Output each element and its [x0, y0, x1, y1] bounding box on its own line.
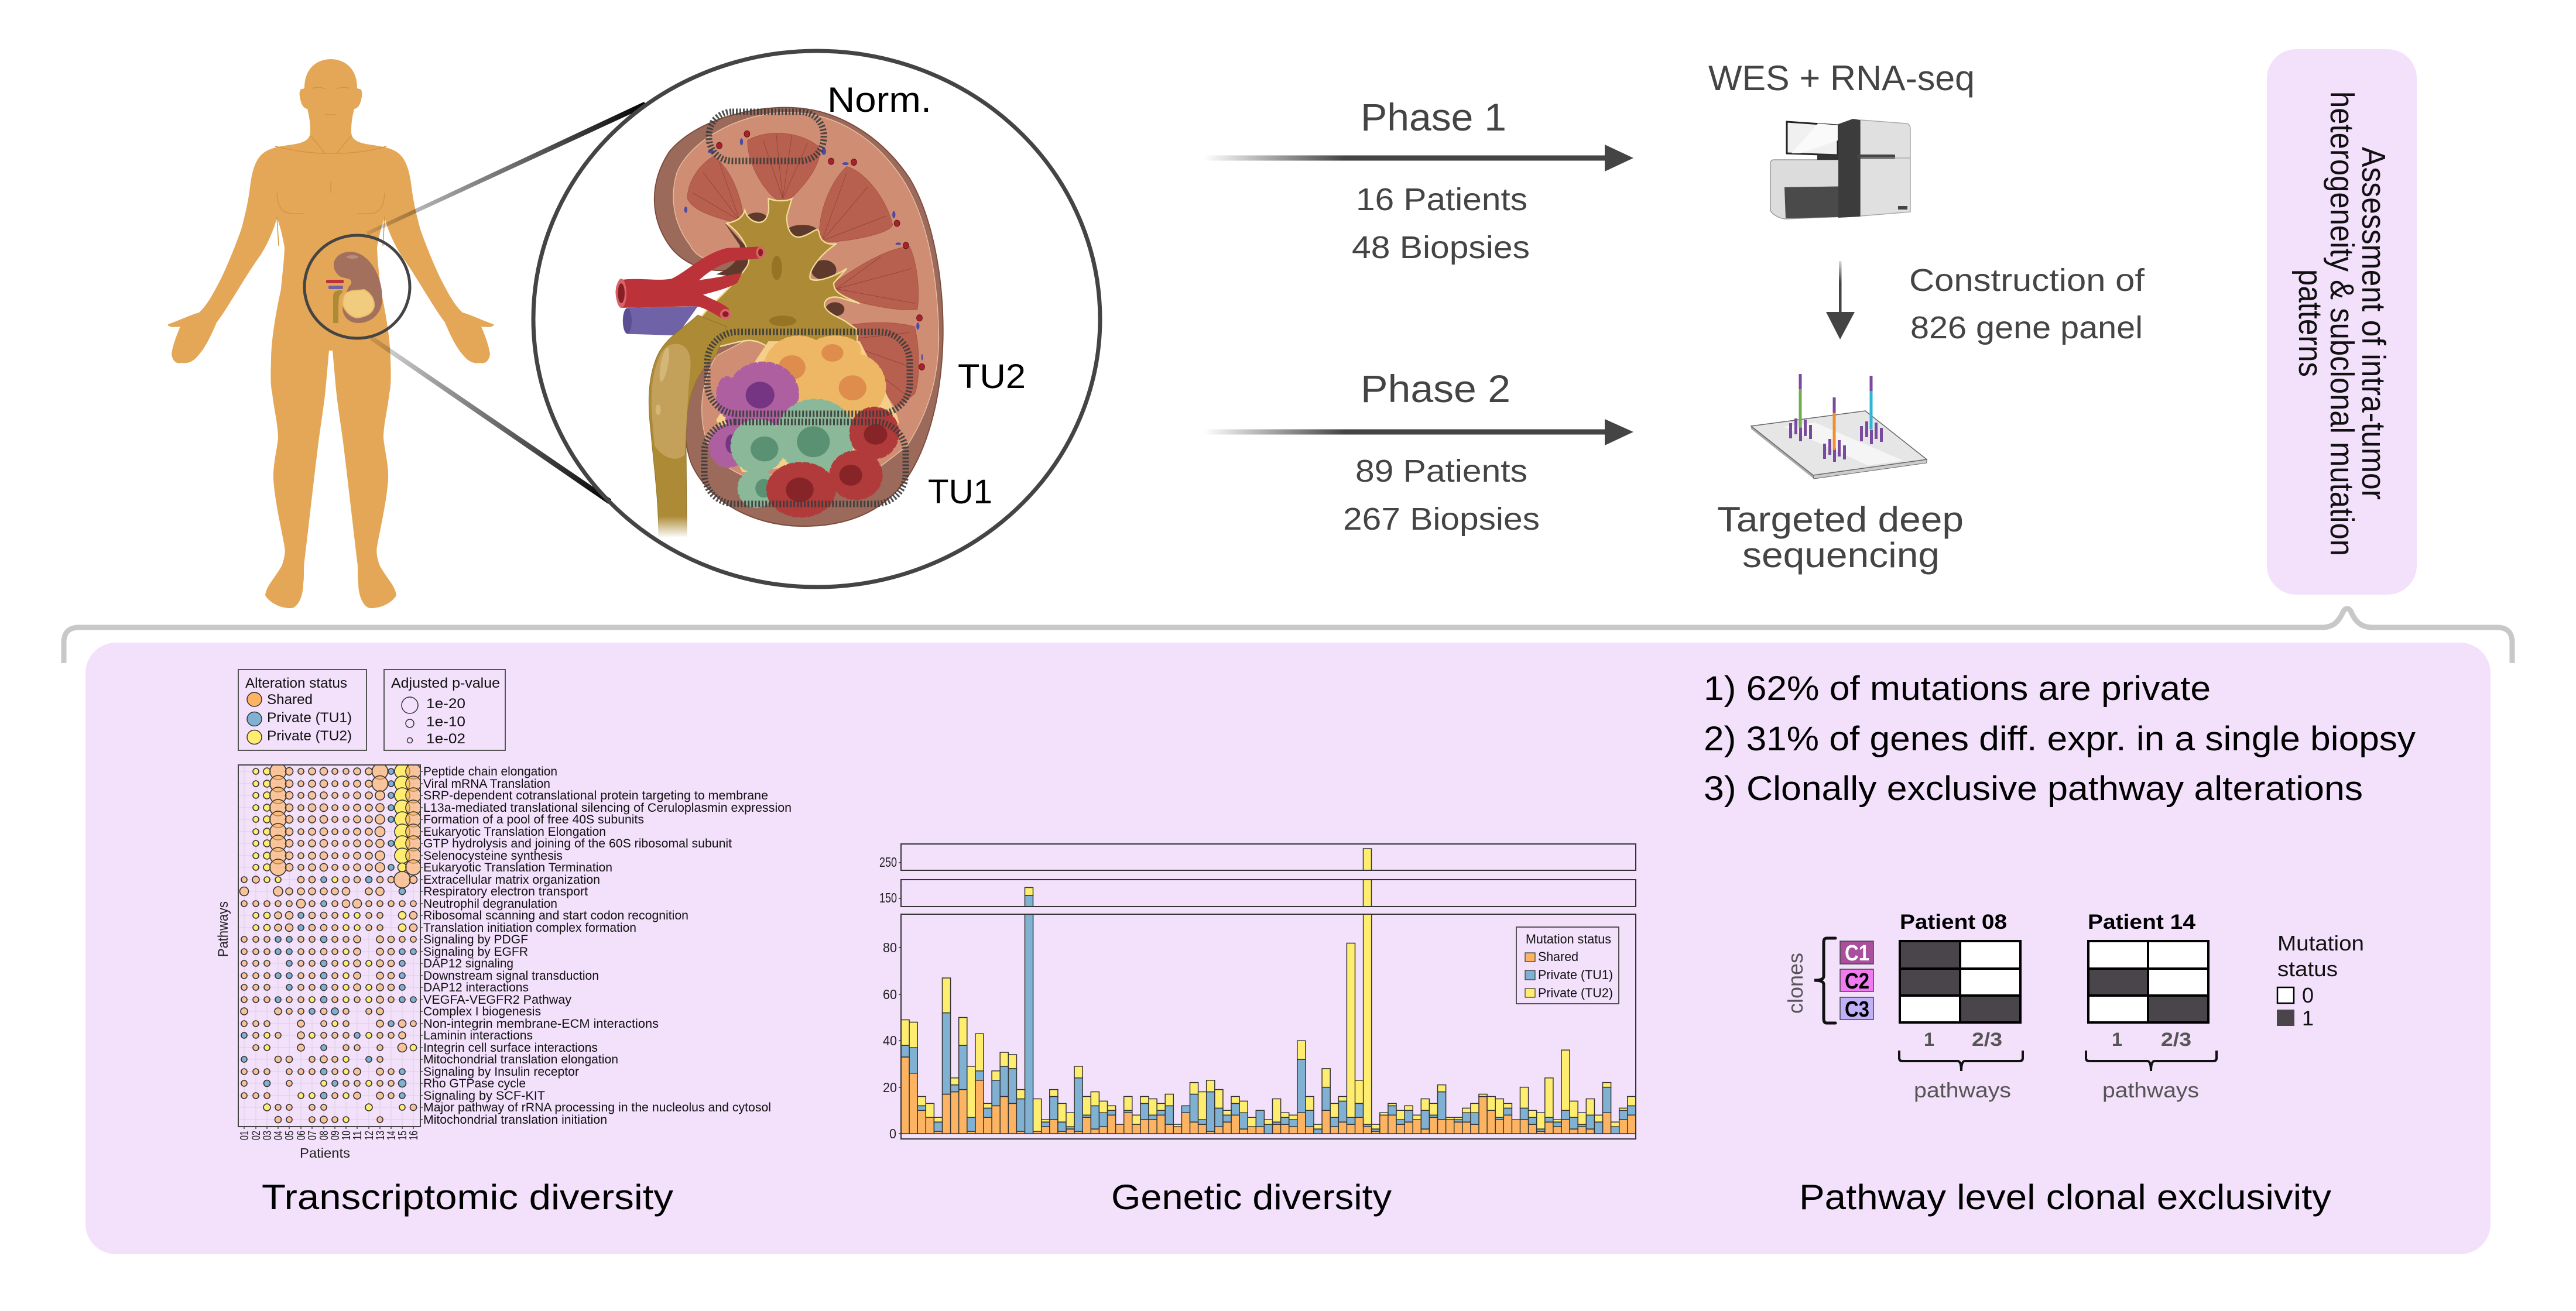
text: targeted deep sequencing: [1717, 500, 1964, 575]
heading: Patient 08: Patient 08: [1900, 911, 2007, 934]
key finding 2: 2) 31% of genes diff. expr. in a single biopsy: [1704, 720, 2416, 758]
pathway labels: Formation of a pool of free 40S subunits: [423, 813, 644, 826]
pathway labels: Viral mRNA Translation: [423, 777, 550, 791]
text: construction of: Construction of: [1909, 263, 2145, 298]
pathway labels: VEGFA-VEGFR2 Pathway: [423, 993, 572, 1007]
legend: adjusted p-value: [384, 670, 505, 750]
text: phase 2 biopsies: 267 Biopsies: [1343, 502, 1540, 537]
clone chip C2: C2: [1845, 969, 1869, 994]
legend: mutation status heatmap: 1: [2302, 1006, 2314, 1030]
legend: alteration status: Private (TU2): [267, 728, 352, 744]
heatmap: patient 14: [2088, 941, 2208, 1022]
chart: stacked mutation bars: [899, 844, 1636, 1139]
patient tick labels: 02: [250, 1131, 263, 1140]
bracket: clones: [1814, 938, 1835, 1023]
pathway labels: Signaling by EGFR: [423, 945, 528, 959]
pathway labels: SRP-dependent cotranslational protein targeting to membrane: [423, 789, 768, 802]
pathway labels: Selenocysteine synthesis: [423, 849, 563, 863]
legend: alteration status: Private (TU1): [267, 710, 352, 726]
patient tick labels: 10: [340, 1131, 353, 1140]
legend: mutation status bars: Private (TU1): [1538, 967, 1613, 982]
pathway labels: Peptide chain elongation: [423, 765, 557, 778]
pathway labels: GTP hydrolysis and joining of the 60S ribosomal subunit: [423, 837, 732, 850]
patient tick labels: 15: [396, 1131, 409, 1140]
bar chart y axis labels: 150: [879, 890, 897, 905]
heading: Phase 1: Phase 1: [1361, 95, 1506, 139]
pathway labels: Laminin interactions: [423, 1029, 533, 1042]
column labels patient 08: 2/3: [1972, 1029, 2002, 1050]
pathway labels: Integrin cell surface interactions: [423, 1041, 598, 1055]
patient tick labels: 09: [329, 1131, 342, 1140]
patient tick labels: 13: [374, 1131, 387, 1140]
pathway labels: Downstream signal transduction: [423, 969, 599, 983]
patient tick labels: 03: [261, 1131, 274, 1140]
legend: adjusted p-value: 1e-10: [426, 714, 465, 730]
bar chart y axis labels: 40: [883, 1033, 897, 1048]
panel: assessment callout: heterogeneity & subclonal mutation: [2323, 91, 2361, 556]
caption: pathway level clonal exclusivity: Pathway level clonal exclusivity: [1799, 1178, 2331, 1217]
tumor cells: [710, 337, 899, 516]
legend: mutation status bars: Shared: [1538, 949, 1578, 964]
panel: results background: [85, 643, 2491, 1254]
legend: alteration status: [238, 670, 366, 750]
small magnifier ellipse: [304, 235, 410, 338]
panel: assessment callout: patterns: [2291, 269, 2329, 377]
text: phase 2 patients: 89 Patients: [1355, 454, 1527, 489]
icon: sequencer machine: [1770, 119, 1910, 219]
zoom line upper: [366, 102, 647, 235]
pathway labels: DAP12 interactions: [423, 981, 529, 994]
column labels patient 14: [2112, 1029, 2191, 1050]
pathway labels: Respiratory electron transport: [423, 885, 588, 898]
pathway labels: Signaling by SCF-KIT: [423, 1089, 545, 1103]
arrow: to gene panel: [1826, 261, 1855, 339]
pathway labels: Signaling by Insulin receptor: [423, 1065, 579, 1079]
chart: pathway dot plot: [238, 763, 423, 1129]
patient tick labels: 05: [283, 1131, 296, 1140]
bar chart y axis labels: [879, 854, 897, 1141]
patient tick labels: 12: [363, 1131, 376, 1140]
legend: mutation status bars: Private (TU2): [1538, 986, 1613, 1000]
pathway labels: Non-integrin membrane-ECM interactions: [423, 1017, 659, 1031]
patient tick labels: 07: [306, 1131, 319, 1140]
pathway labels: L13a-mediated translational silencing of Ceruloplasmin expression: [423, 801, 792, 815]
label: clones: clones: [1783, 953, 1807, 1014]
pathway labels: Neutrophil degranulation: [423, 897, 557, 911]
legend: alteration status: Alteration status: [245, 675, 347, 691]
label: pathways 14: pathways: [2102, 1078, 2199, 1102]
text: phase 1 biopsies: 48 Biopsies: [1352, 230, 1530, 265]
legend: adjusted p-value: Adjusted p-value: [391, 675, 500, 691]
arrow: phase 1: [1204, 145, 1633, 171]
legend: mutation status bars: Mutation status: [1526, 932, 1611, 946]
patient tick labels: [238, 1131, 420, 1140]
axis title: Pathways: Pathways: [215, 901, 231, 957]
pathway labels: Extracellular matrix organization: [423, 873, 600, 887]
panel: assessment callout: [2267, 49, 2417, 595]
text: targeted deep sequencing: Targeted deep: [1717, 500, 1964, 539]
pathway labels: Translation initiation complex formation: [423, 921, 636, 935]
pathway labels: Mitochondrial translation initiation: [423, 1113, 607, 1127]
legend: alteration status: Shared: [267, 692, 313, 708]
brace: pathways patient 14: [2086, 1051, 2217, 1071]
icon: human body with kidney: [168, 59, 494, 608]
column labels patient 14: 1: [2112, 1029, 2122, 1050]
text: phase 1 patients: 16 Patients: [1356, 182, 1527, 217]
pathway labels: Rho GTPase cycle: [423, 1077, 526, 1090]
heading: WES + RNA-seq: WES + RNA-seq: [1708, 59, 1975, 98]
bar chart y axis labels: 250: [879, 854, 897, 870]
patient tick labels: 11: [351, 1131, 364, 1140]
patient tick labels: 08: [318, 1131, 331, 1140]
text: 826 gene panel: 826 gene panel: [1910, 310, 2143, 345]
clone chip C3: C3: [1845, 997, 1869, 1022]
pathway labels: Major pathway of rRNA processing in the nucleolus and cytosol: [423, 1101, 771, 1114]
pathway labels: DAP12 signaling: [423, 957, 513, 970]
legend: mutation status heatmap: status: [2277, 957, 2338, 981]
bar chart y axis labels: 20: [883, 1080, 897, 1095]
illustration: kidney cross-section with tumor: [616, 108, 943, 538]
patient tick labels: 14: [385, 1131, 398, 1140]
heading: Phase 2: Phase 2: [1361, 367, 1510, 410]
column labels patient 08: 1: [1924, 1029, 1934, 1050]
icon: small kidney in body: [326, 252, 382, 323]
key finding 3: 3) Clonally exclusive pathway alterations: [1704, 770, 2363, 808]
heatmap: patient 08: [1900, 941, 2020, 1022]
caption: transcriptomic diversity: Transcriptomic diversity: [262, 1178, 673, 1217]
heading: Patient 14: Patient 14: [2088, 911, 2196, 934]
key finding 1: 1) 62% of mutations are private: [1704, 670, 2211, 708]
bar chart y axis labels: 60: [883, 987, 897, 1002]
column labels patient 08: [1924, 1029, 2002, 1050]
legend: mutation status bars: [1516, 927, 1619, 1004]
column labels patient 14: 2/3: [2161, 1029, 2191, 1050]
axis title: Patients: Patients: [300, 1145, 350, 1161]
legend: adjusted p-value: 1e-02: [426, 731, 465, 747]
label: Norm.: Norm.: [827, 80, 931, 119]
caption: genetic diversity: Genetic diversity: [1111, 1178, 1392, 1217]
bar chart y axis labels: 80: [883, 940, 897, 955]
legend: mutation status heatmap: [2277, 931, 2364, 1030]
large kidney magnifier ellipse: [533, 51, 1100, 587]
icon: targeted sequencing slide with probes: [1751, 374, 1927, 479]
label: TU1: TU1: [928, 473, 992, 511]
pathway labels: Mitochondrial translation elongation: [423, 1053, 618, 1066]
pathway labels: Signaling by PDGF: [423, 933, 528, 946]
legend: mutation status heatmap: Mutation: [2277, 931, 2364, 955]
pathway labels: [423, 765, 792, 1127]
label: pathways 08: pathways: [1914, 1078, 2011, 1102]
clone chip C1: C1: [1845, 941, 1869, 966]
biopsy region: TU1: [704, 422, 906, 504]
zoom line lower: [369, 336, 611, 504]
biopsy region: normal: [709, 112, 824, 161]
patient tick labels: 16: [407, 1131, 420, 1140]
patient tick labels: 06: [295, 1131, 308, 1140]
arrow: phase 2: [1204, 419, 1633, 445]
bar chart y axis labels: 0: [889, 1126, 896, 1141]
pathway labels: Ribosomal scanning and start codon recognition: [423, 909, 688, 922]
legend: adjusted p-value: 1e-20: [426, 696, 465, 712]
panel: assessment callout: Assessment of intra-tumor: [2355, 147, 2392, 500]
bracket connector: [64, 609, 2512, 663]
biopsy region: TU2: [707, 332, 910, 414]
text: targeted deep sequencing: sequencing: [1742, 536, 1940, 575]
legend: mutation status heatmap: 0: [2302, 983, 2314, 1007]
pathway labels: Eukaryotic Translation Termination: [423, 861, 612, 874]
brace: pathways patient 08: [1899, 1051, 2023, 1071]
pathway labels: Eukaryotic Translation Elongation: [423, 825, 606, 839]
patient tick labels: 01: [238, 1131, 251, 1140]
pathway labels: Complex I biogenesis: [423, 1005, 541, 1018]
label: TU2: TU2: [958, 358, 1026, 396]
patient tick labels: 04: [272, 1131, 285, 1140]
